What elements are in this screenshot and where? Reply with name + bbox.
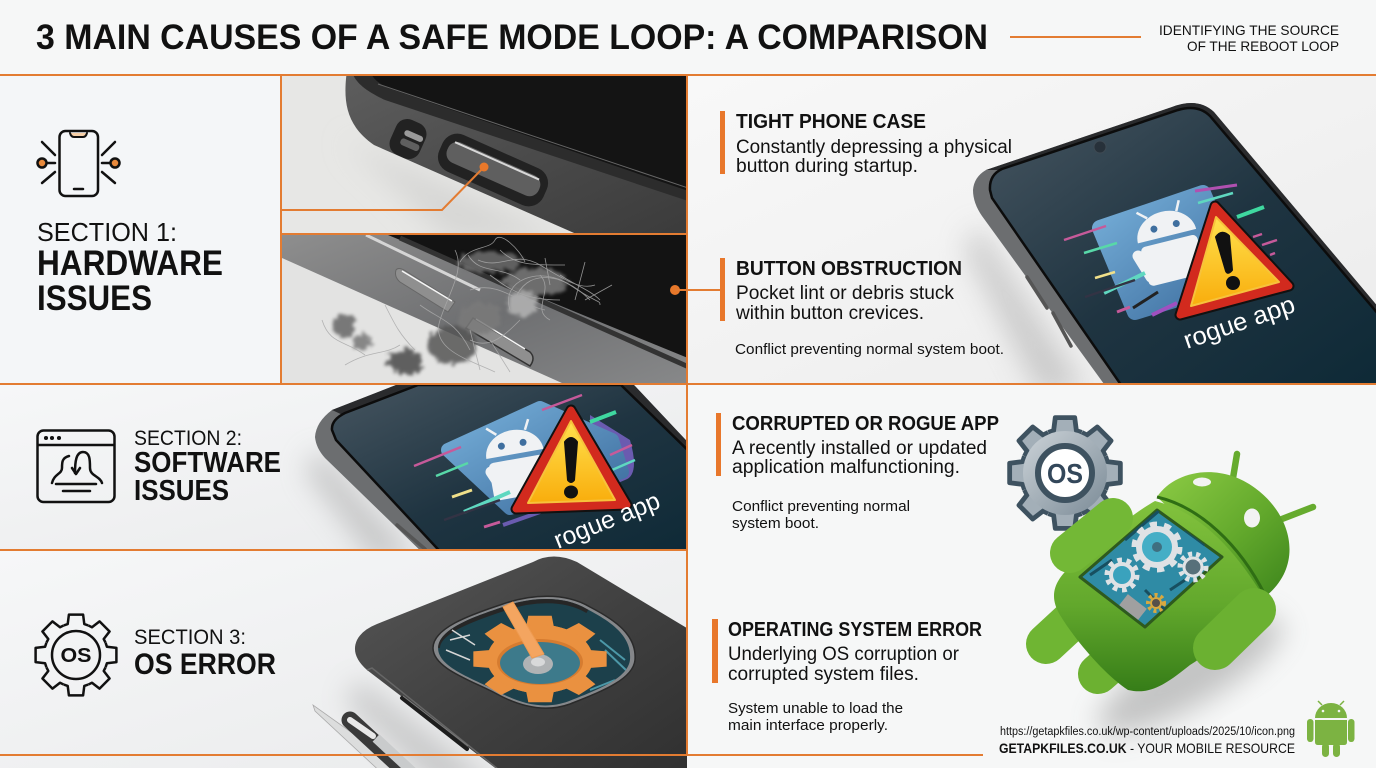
tight phone case text: Constantly depressing a physical: [736, 137, 1012, 158]
buttons: [396, 268, 455, 312]
operating system error text: OPERATING SYSTEM ERROR: [728, 619, 982, 641]
arms: [1070, 518, 1113, 553]
system note: System unable to load the: [728, 701, 903, 717]
tight phone case text: button during startup.: [736, 156, 918, 177]
corrupted app text: [716, 413, 999, 478]
corrupted app text: A recently installed or updated: [732, 438, 987, 459]
icon: os gear: OS: [60, 645, 91, 667]
panel: section 1 hardware heading: [37, 131, 223, 318]
button obstruction text: BUTTON OBSTRUCTION: [736, 258, 962, 280]
app icon: [1100, 193, 1240, 312]
subtitle: IDENTIFYING THE SOURCE: [1159, 22, 1339, 38]
tight phone case text: TIGHT PHONE CASE: [736, 111, 926, 133]
subtitle: OF THE REBOOT LOOP: [1187, 38, 1339, 54]
callout dot: power button: [480, 162, 488, 172]
system note: [728, 701, 903, 734]
section 1 label: SECTION 1:: [37, 217, 177, 247]
body: [1054, 501, 1263, 691]
panel: lint photo: [282, 235, 686, 383]
panel: tight case photo: [282, 76, 686, 233]
lint blobs: [333, 252, 567, 375]
section 1 name: [37, 244, 223, 318]
panel: software descriptions: [716, 413, 999, 532]
section 1 name: ISSUES: [37, 279, 152, 318]
section 3 label: SECTION 3:: [134, 626, 246, 649]
icon: os gear: [36, 615, 116, 695]
power button: [438, 134, 548, 206]
panel: os descriptions: [712, 619, 982, 734]
icon: vibrating phone: [38, 131, 120, 196]
button obstruction text: within button crevices.: [735, 303, 924, 324]
illustration: android robot: [1046, 454, 1313, 753]
icon: grey os gear: OS: [1047, 458, 1083, 489]
lint fibres: [322, 237, 612, 372]
operating system error text: corrupted system files.: [728, 664, 919, 685]
conflict note: Conflict preventing normal system boot.: [735, 342, 1004, 358]
legs: [1046, 620, 1072, 644]
subtitle: [1159, 22, 1339, 54]
conflict note: system boot.: [732, 516, 819, 532]
conflict note: [732, 499, 910, 532]
section 2 name: SOFTWARE: [134, 447, 281, 479]
rogue app label: rogue app: [550, 487, 664, 555]
callout dot: [670, 285, 680, 295]
tight phone case text: [720, 111, 1012, 177]
section 2 name: [134, 447, 281, 507]
head: [1157, 472, 1290, 597]
footer credit: GETAPKFILES.CO.UK - YOUR MOBILE RESOURCE: [999, 740, 1295, 756]
conflict note: Conflict preventing normal: [732, 499, 910, 515]
section 2 label: SECTION 2:: [134, 427, 242, 450]
app icon: [448, 408, 634, 508]
icon: small android logo: [1307, 701, 1354, 757]
operating system error text: Underlying OS corruption or: [728, 644, 960, 665]
panel: section 2 software heading: [38, 427, 281, 507]
operating system error text: [712, 619, 982, 685]
warning triangle: [1180, 206, 1289, 315]
illustration: software phone: [305, 385, 700, 560]
small button: [390, 119, 426, 159]
panel: hardware descriptions: [720, 111, 1012, 358]
illustration: phone with rogue app warning: [965, 103, 1376, 395]
footer credit: https://getapkfiles.co.uk/wp-content/uploads/2025/10/icon.png: [1000, 726, 1295, 738]
antennas: [1233, 454, 1313, 519]
rogue app label: rogue app: [1180, 290, 1299, 355]
sim ejector pin: [312, 704, 416, 768]
icon: grey os gear: [1010, 418, 1120, 528]
callout: tight case: [281, 168, 483, 210]
corrupted app text: CORRUPTED OR ROGUE APP: [732, 413, 999, 435]
system note: main interface properly.: [728, 718, 888, 734]
title: 3 MAIN CAUSES OF A SAFE MODE LOOP: A COMPARISON: [36, 18, 988, 57]
warning triangle: [516, 410, 627, 509]
footer credit: [999, 726, 1295, 756]
camera cutout: [433, 596, 635, 708]
icon: app window: [38, 430, 114, 502]
glitch streaks: [414, 395, 635, 527]
illustration: phone back with orange gear: [313, 556, 700, 768]
corrupted app text: application malfunctioning.: [732, 457, 960, 478]
button obstruction text: Pocket lint or debris stuck: [736, 283, 954, 304]
panel: section 3 os heading: [36, 615, 276, 695]
section 3 name: OS ERROR: [134, 648, 276, 681]
orange gear: [473, 616, 607, 702]
exposed mechanism: [1080, 510, 1222, 627]
button obstruction text: [720, 258, 962, 324]
glitch streaks: [1064, 185, 1277, 315]
section 2 name: ISSUES: [134, 475, 229, 507]
gears: [1107, 525, 1206, 611]
callout: button obstruction: [675, 289, 720, 291]
section 1 name: HARDWARE: [37, 244, 223, 283]
